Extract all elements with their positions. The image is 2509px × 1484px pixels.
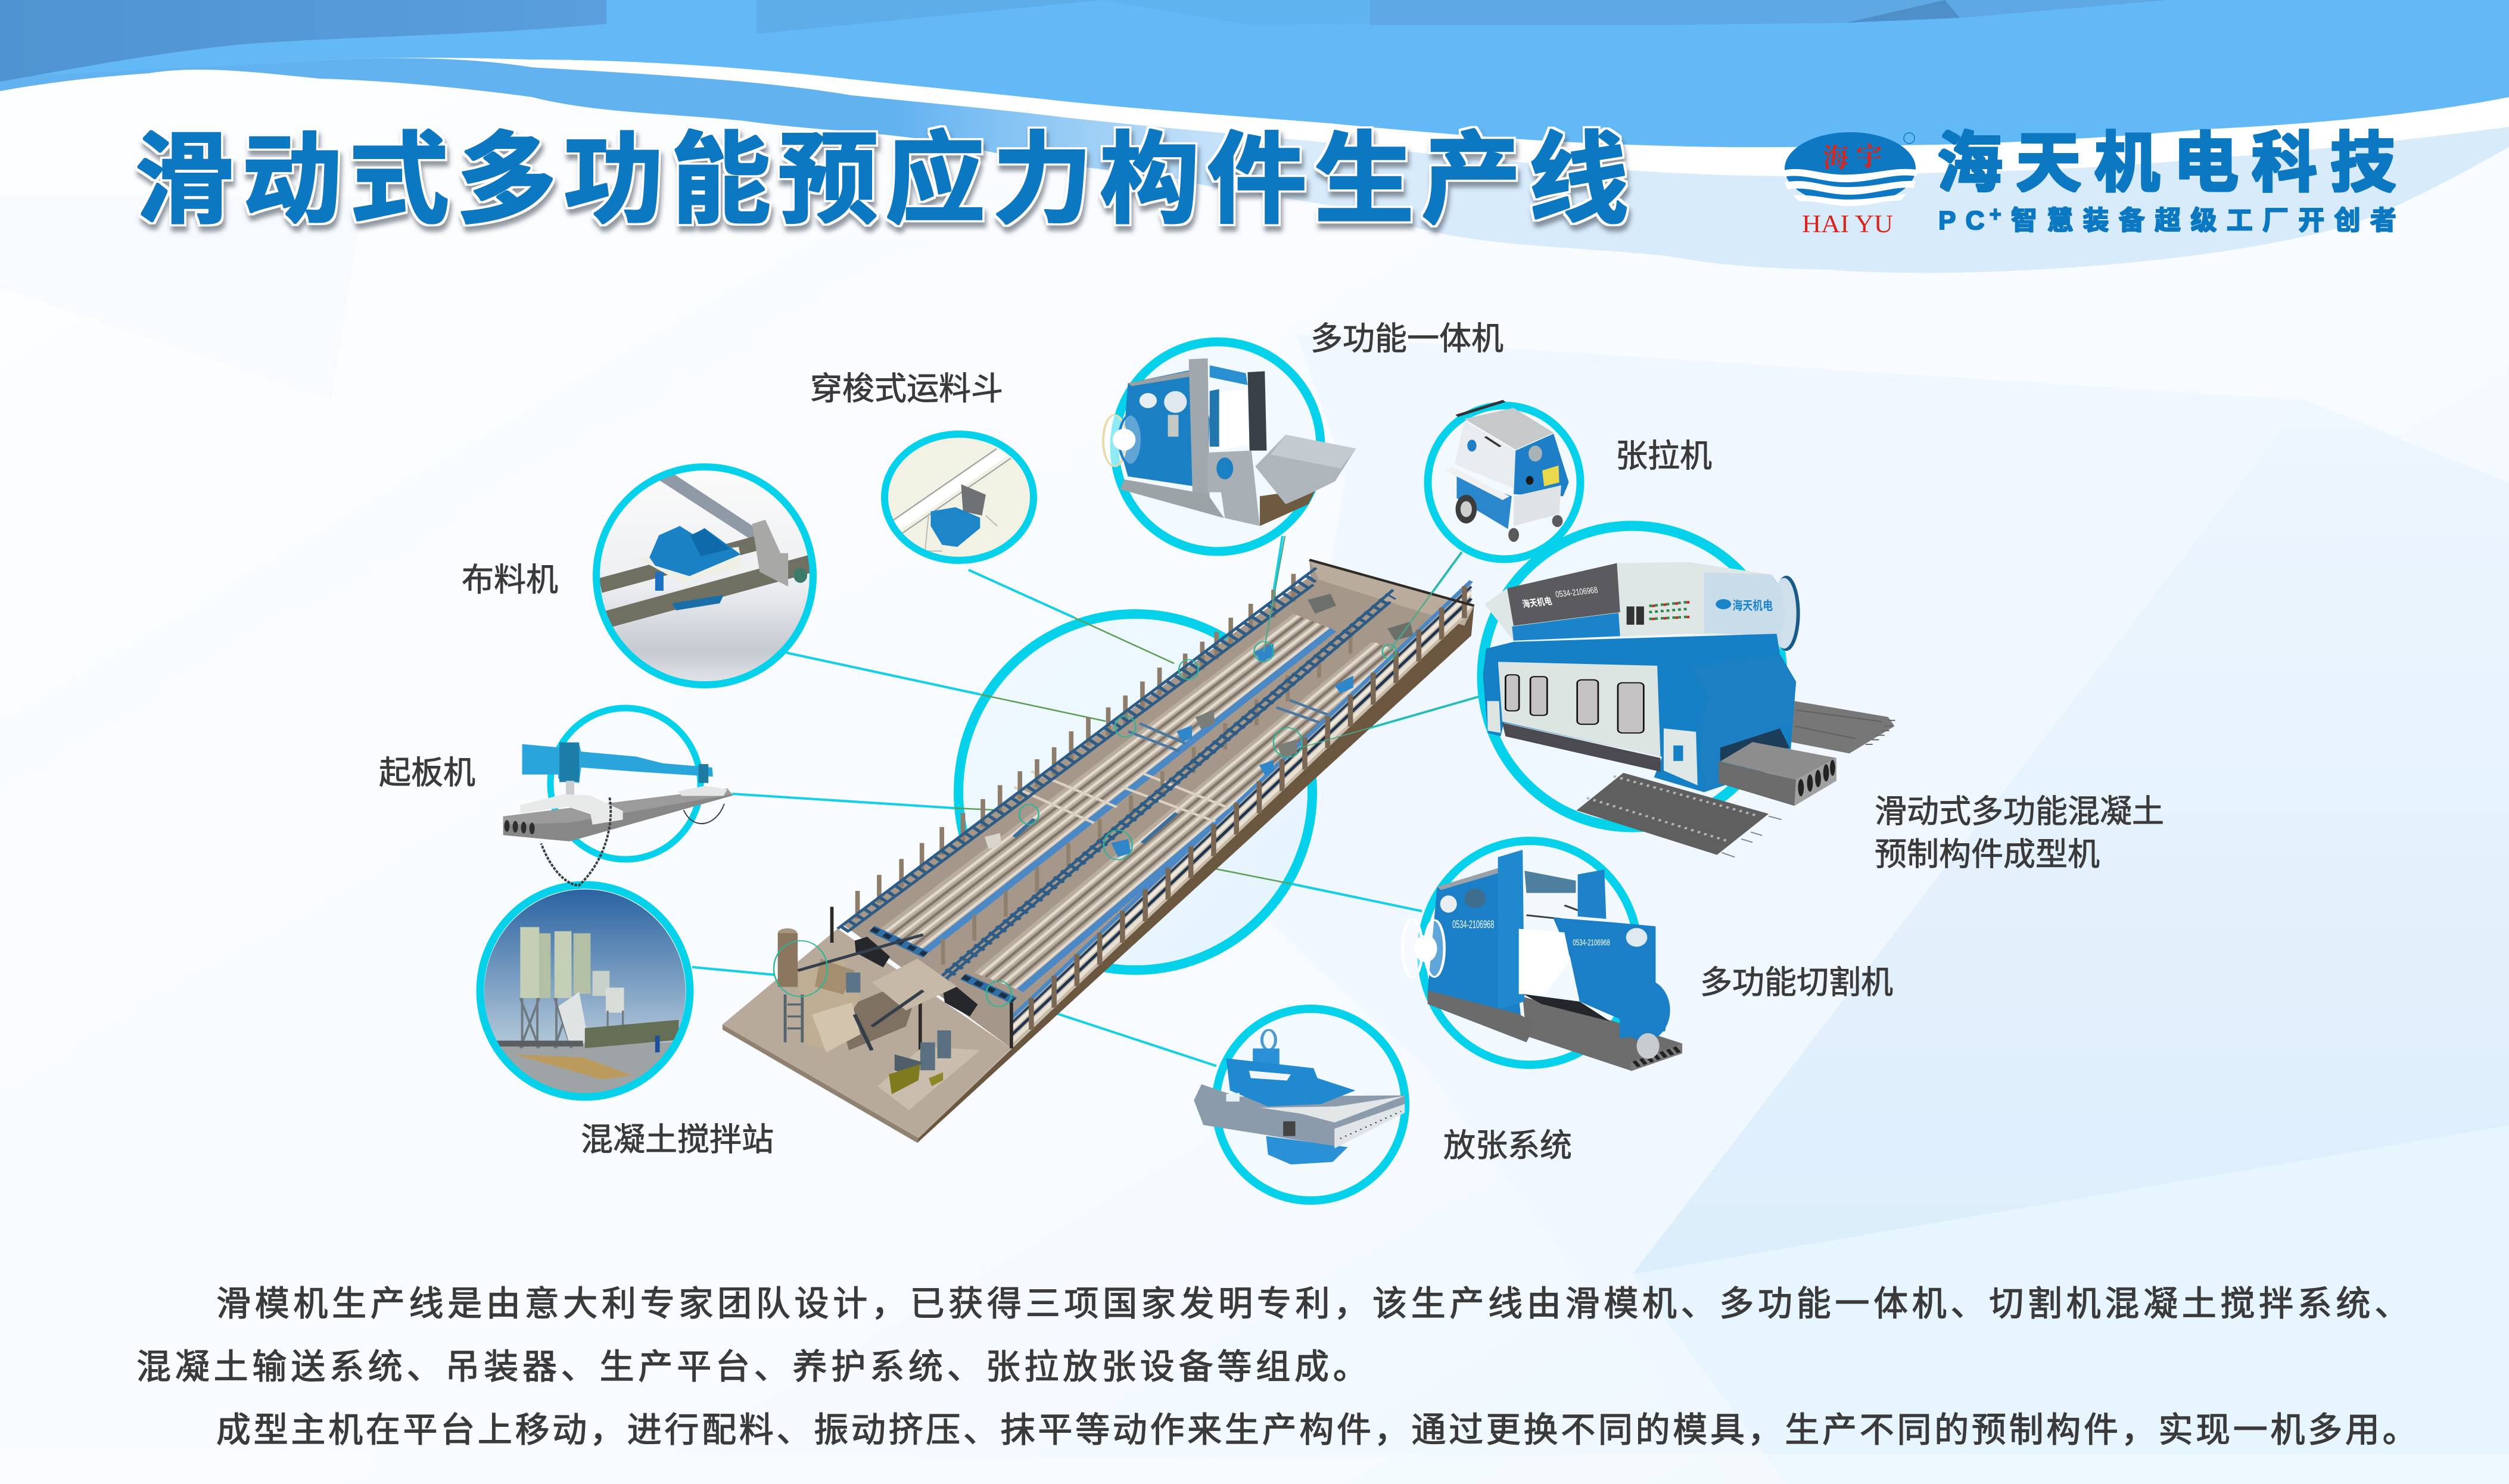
label: spreader: 布料机 [462, 562, 558, 598]
header wave band [0, 0, 2509, 273]
cross bars [1014, 700, 1350, 823]
label: moulding machine: 滑动式多功能混凝土 [1875, 794, 2164, 830]
panel: cutting machine: 0534-2106968 [1573, 937, 1610, 947]
production bays [880, 614, 1413, 990]
label: slab lifter: 起板机 [379, 755, 475, 791]
label: cutting machine: 多功能切割机 [1700, 965, 1893, 1000]
connector lines [692, 536, 1478, 1066]
crane trusses [838, 568, 1393, 994]
logo: Hai Yu emblem: 海 [1823, 144, 1849, 173]
label: mixing station: 混凝土搅拌站 [581, 1122, 774, 1158]
hall end frame [832, 560, 1474, 1050]
mixing plant [778, 928, 980, 1110]
equipment on bays [985, 594, 1413, 857]
factory isometric view [723, 536, 1478, 1143]
logo: slogan: + [1990, 203, 2011, 226]
panel: cutting machine [1402, 841, 1682, 1071]
panel: slip-form moulding machine: 0534-2106968 [1555, 585, 1599, 599]
label: release system: 放张系统 [1443, 1128, 1572, 1164]
green feeders [1264, 536, 1478, 747]
left columns [858, 574, 1293, 919]
panel: concrete mixing station [477, 885, 690, 1102]
title: 滑动式多功能预应力构件生产线 [135, 124, 1636, 236]
logo: Hai Yu emblem [1783, 132, 1917, 238]
label: moulding machine: 预制构件成型机 [1875, 837, 2100, 872]
description text: 成型主机在平台上移动，进行配料、振动挤压、抹平等动作来生产构件，通过更换不同的模具，生产不同的预制构件，实现一机多用。 [216, 1411, 2420, 1449]
logo: Hai Yu emblem: 宇 [1856, 142, 1882, 172]
panel: slab lifter [503, 708, 733, 886]
panel: cutting machine: 0534-2106968 [1452, 919, 1494, 931]
green connector lines in ring [954, 618, 1291, 884]
panel: tensioning machine [1428, 401, 1580, 559]
panel: multifunction machine [1103, 342, 1356, 551]
logo: slogan: 智慧装备超级工厂开创者 [2011, 206, 2406, 235]
panel: slip-form moulding machine [1482, 526, 1895, 857]
logo: company name: 海天机电科技 [1937, 127, 2409, 200]
main highlight ring [958, 614, 1312, 970]
label: multifunction machine: 多功能一体机 [1310, 321, 1503, 357]
description text: 滑模机生产线是由意大利专家团队设计，已获得三项国家发明专利，该生产线由滑模机、多功能一体机、切割机混凝土搅拌系统、 [216, 1285, 2413, 1323]
near end conveyors [855, 929, 1014, 1017]
panel: release system [1194, 1009, 1405, 1201]
factory floor slab [723, 560, 1474, 1143]
panel: spreader [596, 467, 813, 685]
target markers [774, 641, 1396, 1006]
panel: shuttle hopper [885, 430, 1034, 560]
panel: slip-form moulding machine: 海天机电 [1521, 596, 1553, 610]
description text: 混凝土输送系统、吊装器、生产平台、养护系统、张拉放张设备等组成。 [136, 1348, 1372, 1386]
label: shuttle hopper: 穿梭式运料斗 [810, 371, 1003, 407]
label: tensioning machine: 张拉机 [1615, 438, 1712, 474]
logo: slogan: PC [1938, 206, 1994, 235]
blue edge beams [926, 629, 1413, 990]
description text [136, 1285, 2420, 1449]
right wall [1011, 581, 1471, 1048]
logo: Hai Yu emblem: HAI YU [1802, 211, 1893, 238]
panel: slip-form moulding machine: 海天机电 [1732, 599, 1773, 613]
centre columns [943, 628, 1350, 965]
